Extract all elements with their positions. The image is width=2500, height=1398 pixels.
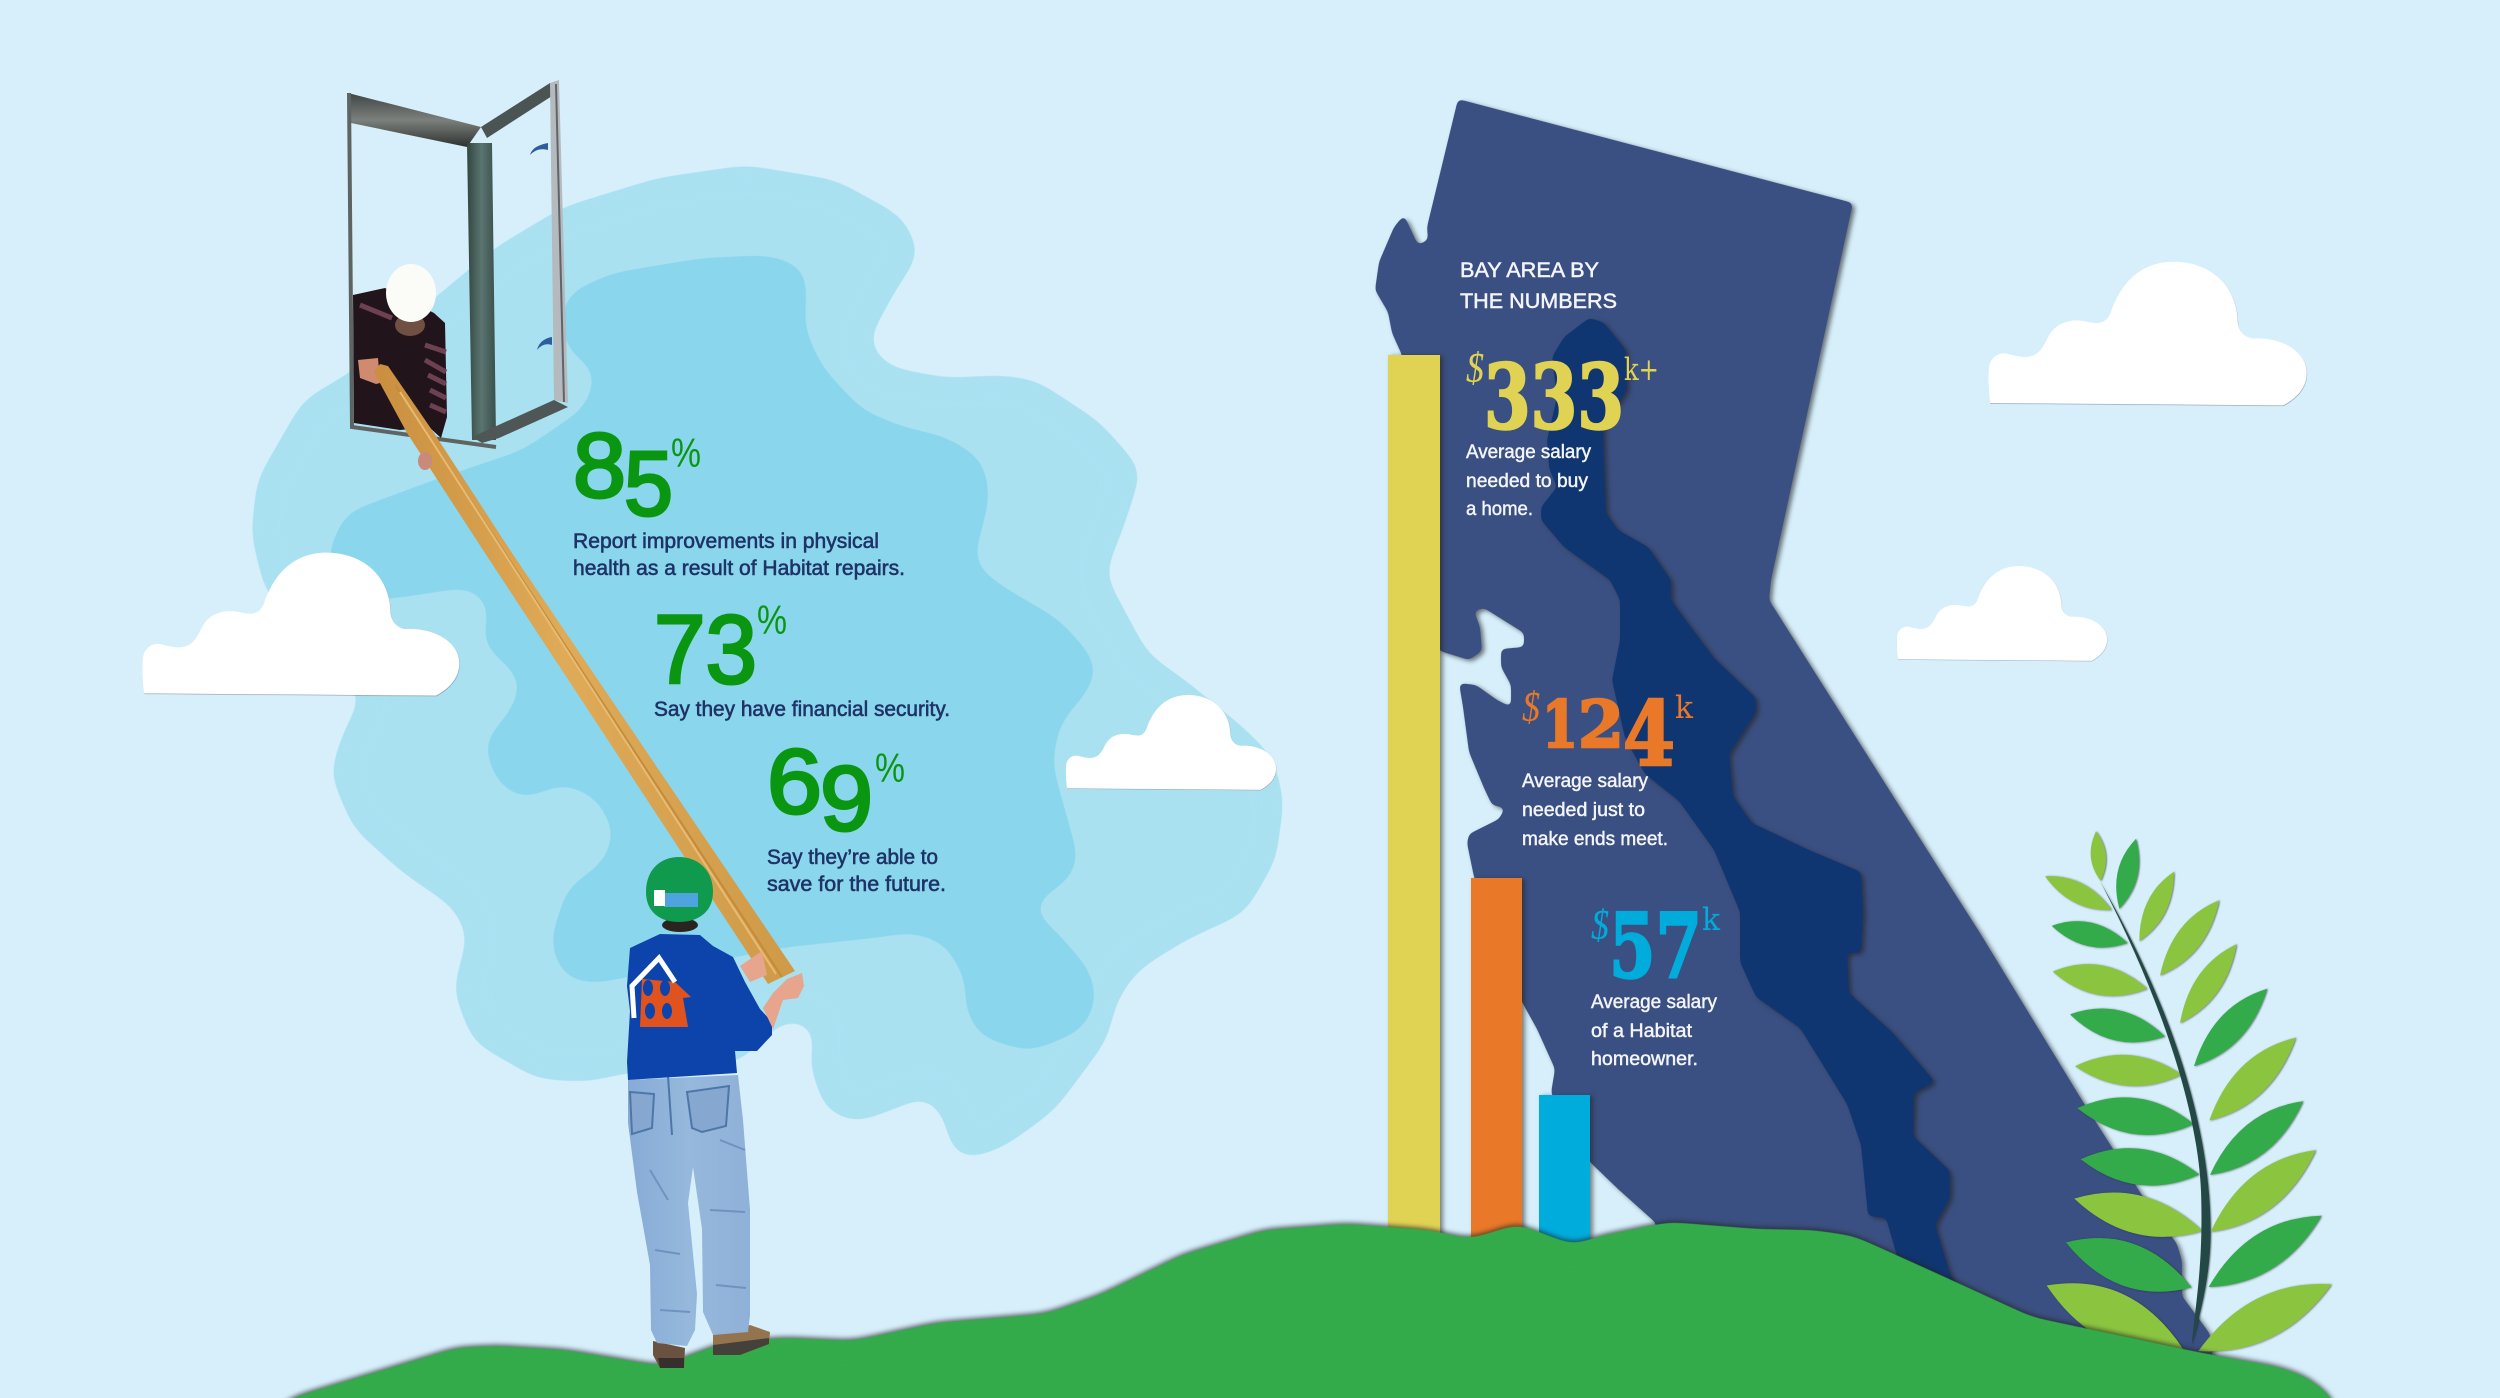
worker body xyxy=(353,288,447,438)
text: average salary of a Habitat homeowner xyxy=(1591,991,1717,1070)
green hard hat xyxy=(646,857,713,922)
icon: cloud top right xyxy=(1988,262,2307,405)
window frame top xyxy=(348,93,481,147)
hat sticker xyxy=(654,890,698,907)
text: financial security: Say they have financial security. xyxy=(654,698,950,721)
icon: fern plant xyxy=(2045,831,2332,1351)
inner blue blob xyxy=(329,255,1097,1052)
boots xyxy=(653,1325,770,1368)
stat: $333k+: 333 xyxy=(1484,344,1624,449)
text: able to save xyxy=(767,846,946,896)
heading: bay area by the numbers: THE NUMBERS xyxy=(1460,288,1617,313)
icon: standing worker xyxy=(627,857,804,1368)
icon: open window with worker xyxy=(348,80,568,447)
heading: bay area by the numbers: BAY AREA BY xyxy=(1460,257,1599,282)
stat: $124k: $ xyxy=(1522,685,1540,731)
jeans creases xyxy=(650,1140,746,1312)
text: able to save: save for the future. xyxy=(767,873,946,896)
stat: 73%: 73 xyxy=(654,595,757,704)
text: average salary to make ends meet: make ends meet. xyxy=(1522,828,1668,850)
text: report improvements: Report improvements in physical xyxy=(573,530,879,553)
worker hand on plank xyxy=(418,452,432,470)
text: average salary to buy a home: Average salary xyxy=(1466,441,1591,463)
stat: 69%: 9 xyxy=(820,748,873,850)
stat: $124k: 1 xyxy=(1542,687,1578,763)
text: average salary to buy a home: a home. xyxy=(1466,498,1533,520)
icon: cloud left xyxy=(142,553,459,696)
stat: $57k: k xyxy=(1702,902,1720,938)
forearm and hands xyxy=(740,951,804,1029)
text: average salary of a Habitat homeowner: homeowner. xyxy=(1591,1048,1698,1070)
heading: bay area by the numbers xyxy=(1460,257,1617,313)
stat: 69%: % xyxy=(875,745,905,791)
jeans pockets xyxy=(630,1076,729,1135)
stat: 69%: 6 xyxy=(767,731,822,833)
stat: $124k: 2 xyxy=(1578,687,1624,763)
stat: 85%: 8 xyxy=(573,415,626,517)
stat: $333k+: k+ xyxy=(1624,352,1659,388)
text: average salary to make ends meet xyxy=(1522,770,1668,850)
text: average salary to buy a home: needed to buy xyxy=(1466,470,1588,492)
stat: $124k xyxy=(1522,681,1693,786)
text: report improvements xyxy=(573,530,905,580)
worker white hard hat xyxy=(386,264,436,322)
window frame left and sill xyxy=(349,93,496,447)
text: average salary of a Habitat homeowner: Average salary xyxy=(1591,991,1717,1013)
stat: $124k: 4 xyxy=(1623,681,1675,786)
stat: 85% xyxy=(573,415,701,535)
icon: cloud lower right xyxy=(1897,566,2107,661)
neck hair xyxy=(662,918,698,932)
jeans xyxy=(628,1075,750,1346)
shirt logo xyxy=(632,958,691,1027)
stat: 85%: 5 xyxy=(624,433,673,535)
text: report improvements: health as a result of Habitat repairs. xyxy=(573,557,905,580)
text: average salary to make ends meet: Average salary xyxy=(1522,770,1648,792)
stat: $57k: $ xyxy=(1591,903,1609,949)
outer light blue blob xyxy=(251,165,1284,1159)
text: average salary of a Habitat homeowner: of a Habitat xyxy=(1591,1020,1693,1042)
window centre glass stile xyxy=(467,143,496,440)
worker face xyxy=(395,314,425,336)
text: average salary to make ends meet: needed just to xyxy=(1522,799,1645,821)
icon: cloud middle xyxy=(1066,695,1276,790)
stat: $124k: k xyxy=(1675,690,1693,726)
stat: $57k: 57 xyxy=(1609,893,1702,998)
text: average salary to buy a home xyxy=(1466,441,1591,520)
bar chart: three salary bars xyxy=(1388,355,1590,1285)
worker arm xyxy=(358,358,380,384)
map of California: Bay Area silhouette xyxy=(1375,99,2215,1380)
wooden plank xyxy=(374,364,795,984)
stat: $333k+: $ xyxy=(1466,346,1484,392)
stat: 69% xyxy=(767,731,905,850)
map: darker central valley xyxy=(1541,318,1965,1300)
stat: 85%: % xyxy=(671,430,701,476)
shirt xyxy=(627,934,772,1080)
text: able to save: Say they’re able to xyxy=(767,846,938,869)
open sash xyxy=(472,80,568,443)
stat: 73%: % xyxy=(757,597,787,643)
green hill xyxy=(230,1222,2345,1398)
